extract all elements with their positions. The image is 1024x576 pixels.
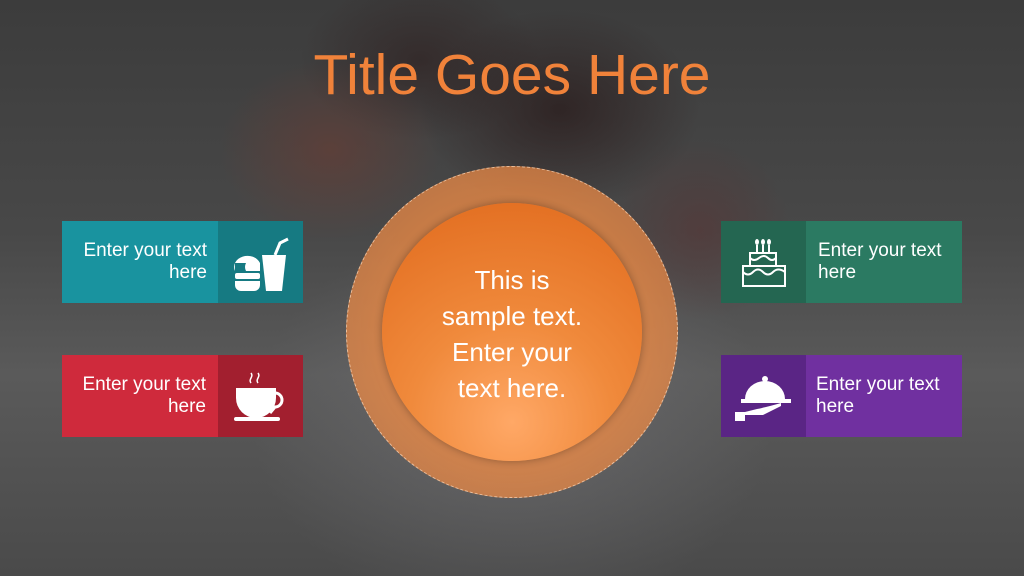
panel: teal: here xyxy=(169,262,207,283)
center circle with text: text here. xyxy=(458,373,566,403)
panel: green xyxy=(721,221,962,303)
panel: green: here xyxy=(818,262,856,283)
icon: cake xyxy=(721,221,806,303)
outer ring xyxy=(346,166,678,498)
center circle with text xyxy=(382,203,642,461)
panel: red: here xyxy=(168,396,206,417)
title: Title Goes Here xyxy=(313,43,711,107)
panel: purple xyxy=(721,355,962,437)
panel: red: Enter your text xyxy=(82,374,206,395)
icon: burger and drink xyxy=(218,221,303,303)
panel: red xyxy=(62,355,303,437)
center circle with text: sample text. xyxy=(442,301,582,331)
panel: green: Enter your text xyxy=(818,240,942,261)
icon: serving dish xyxy=(721,355,806,437)
panel: purple: here xyxy=(816,396,854,417)
center circle with text: Enter your xyxy=(452,337,572,367)
center circle with text: This is xyxy=(474,265,550,295)
panel: purple: Enter your text xyxy=(816,374,940,395)
icon: coffee cup xyxy=(218,355,303,437)
panel: teal: Enter your text xyxy=(83,240,207,261)
panel: teal xyxy=(62,221,303,303)
